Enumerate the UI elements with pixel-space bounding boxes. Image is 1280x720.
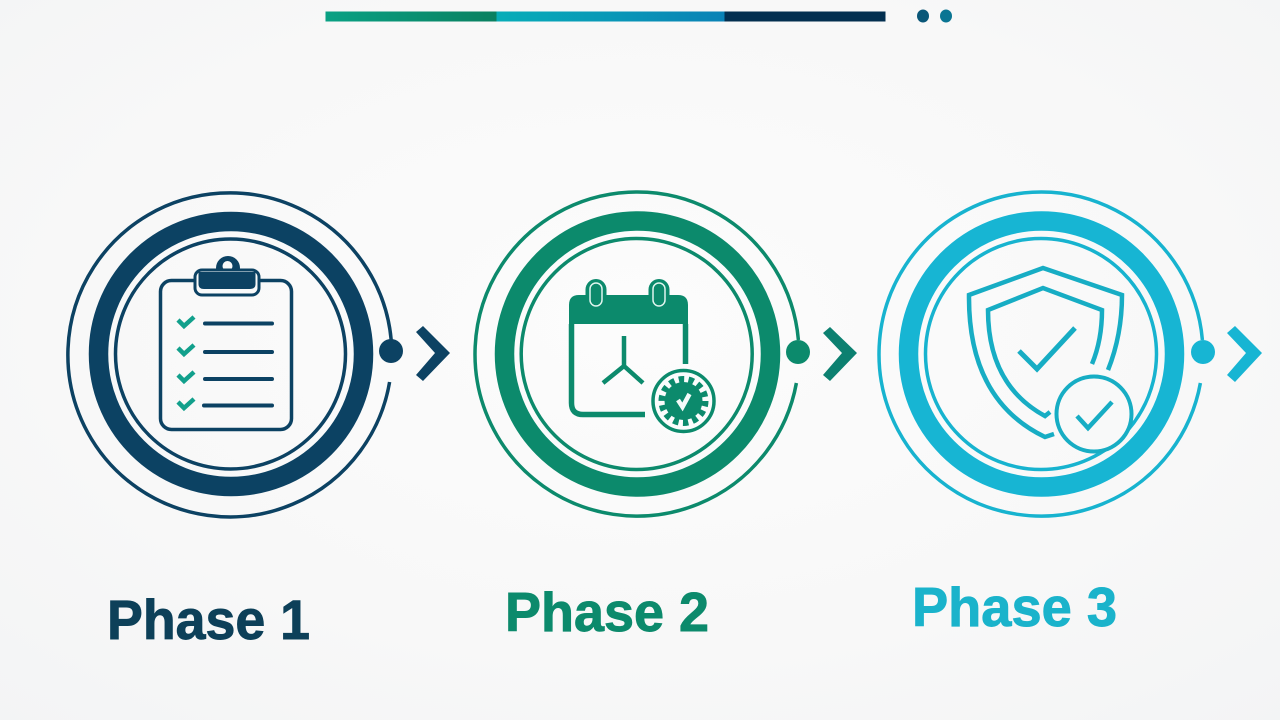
phase 2 inner ring bbox=[521, 238, 752, 470]
phase 2 connector dot bbox=[786, 340, 810, 364]
phase 3 connector dot bbox=[1191, 340, 1215, 364]
phase 1 chevron arrow bbox=[416, 326, 450, 381]
phase 3 thick ring bbox=[908, 221, 1174, 487]
phase 1 outer arc bbox=[68, 193, 391, 517]
heading: Phase 2: Phase 2 bbox=[505, 581, 709, 643]
heading: Phase 1: Phase 1 bbox=[107, 588, 310, 651]
phase 2 outer arc bbox=[475, 192, 798, 516]
phase 3 outer arc bbox=[879, 192, 1202, 516]
phase 2 chevron arrow bbox=[823, 327, 857, 381]
panel: phase 2 bbox=[475, 192, 857, 516]
top progress bar bbox=[326, 12, 886, 22]
top indicator dots bbox=[917, 10, 952, 22]
panel: phase 1 bbox=[68, 193, 450, 517]
heading: Phase 3: Phase 3 bbox=[912, 576, 1117, 638]
phase 1 connector dot bbox=[379, 339, 403, 363]
phase 1 thick ring bbox=[98, 222, 364, 486]
phase 2 thick ring bbox=[504, 221, 770, 487]
phase 1 inner ring bbox=[116, 239, 346, 469]
phase 3 chevron arrow bbox=[1227, 326, 1262, 382]
phase 3 inner ring bbox=[926, 238, 1156, 470]
icon: shield with check badge bbox=[969, 268, 1132, 452]
panel: phase 3 bbox=[879, 192, 1262, 516]
icon: clipboard checklist bbox=[160, 256, 292, 430]
icon: calendar with gear badge bbox=[569, 279, 718, 436]
